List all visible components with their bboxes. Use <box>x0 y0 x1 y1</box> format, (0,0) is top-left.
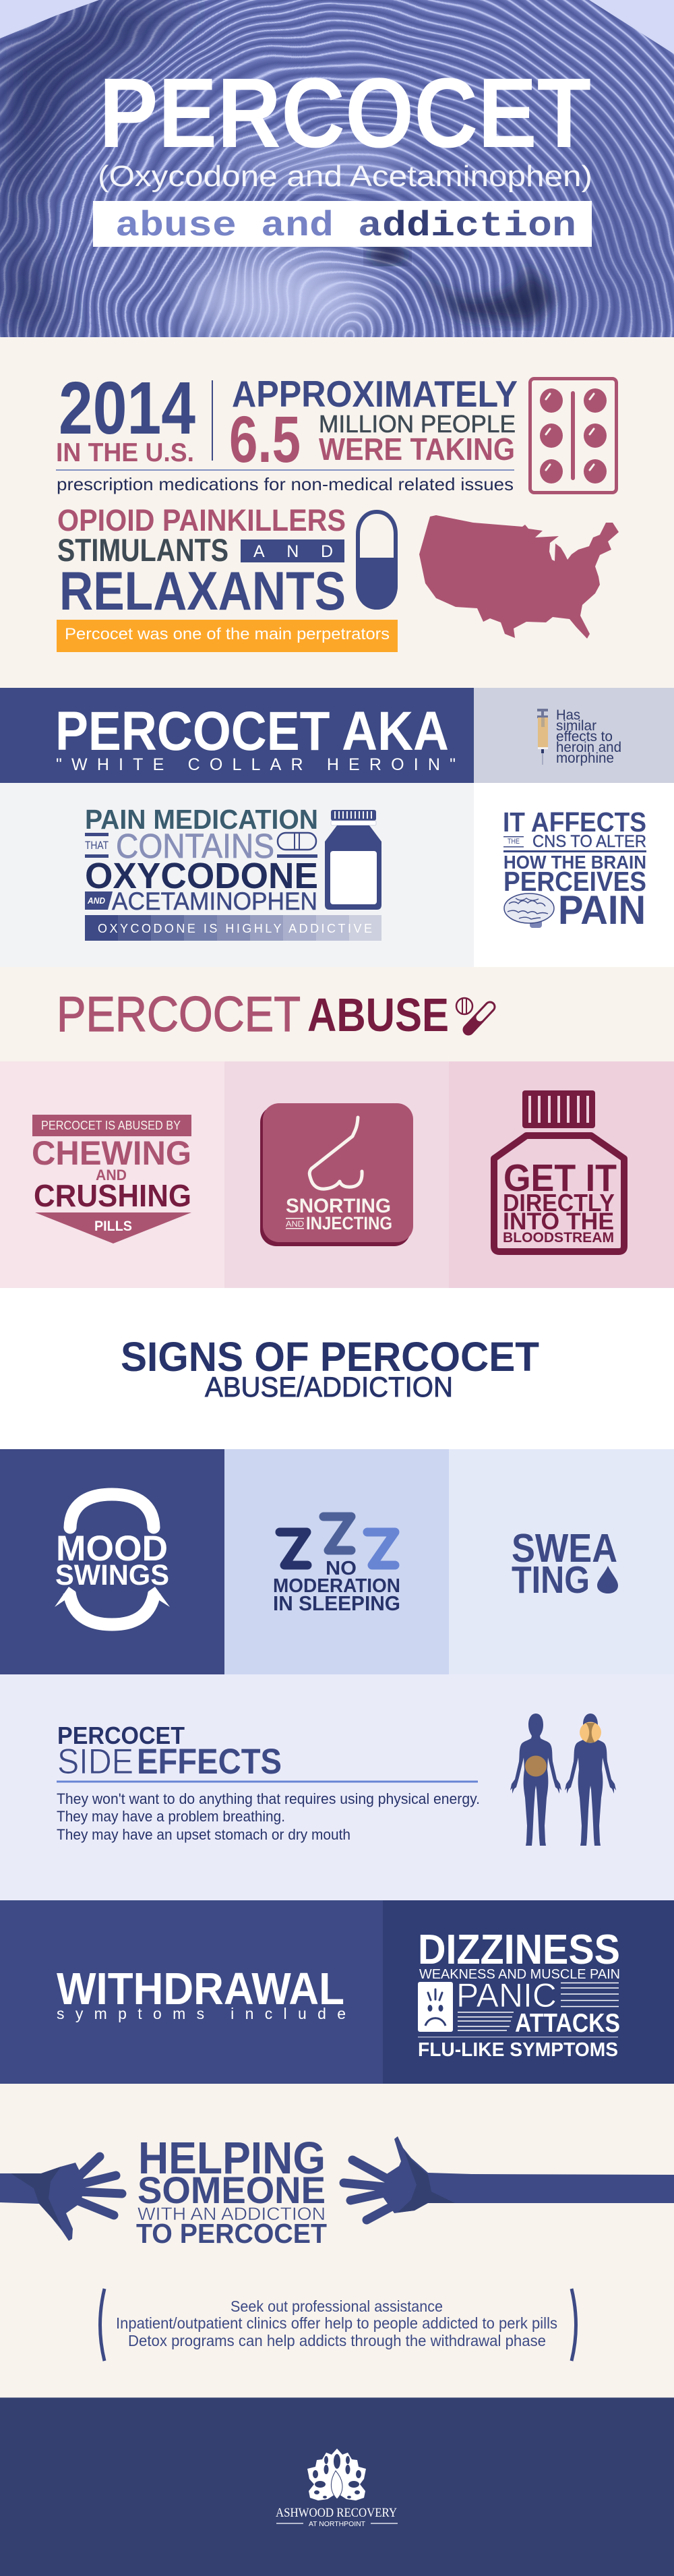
title: PERCOCET <box>99 58 591 169</box>
and: AND <box>286 1219 304 1229</box>
attacks: ATTACKS <box>515 2009 620 2038</box>
and tag <box>85 891 113 910</box>
oxycodone: OXYCODONE <box>85 856 318 896</box>
similar effects text: effects to <box>556 729 613 744</box>
icon: bottle outline <box>494 1136 624 1252</box>
icon: nose <box>309 1117 362 1189</box>
in sleeping: IN SLEEPING <box>273 1591 400 1615</box>
get it: GET IT <box>503 1157 617 1200</box>
similar effects text: heroin and <box>556 740 621 755</box>
icon: letter Z mid <box>324 1517 351 1550</box>
panel: similar effects <box>474 688 674 783</box>
panel: sweating <box>449 1449 674 1674</box>
crushing: CRUSHING <box>34 1178 191 1213</box>
icon: right hand <box>344 2136 674 2220</box>
icon: tablet <box>456 998 472 1014</box>
panel: mood swings <box>0 1449 224 1674</box>
side effect list <box>57 1790 480 1843</box>
no: NO <box>326 1558 357 1579</box>
panel: signs heading <box>0 1288 674 1449</box>
subheading: abuse/addiction: ABUSE/ADDICTION <box>205 1371 453 1403</box>
icon: capsule <box>468 1007 490 1030</box>
that <box>85 833 109 858</box>
how the brain: HOW THE BRAIN <box>503 852 646 873</box>
logo: Ashwood peacock <box>307 2449 366 2500</box>
panel: helping someone <box>0 2084 674 2397</box>
withdrawal: WITHDRAWAL <box>57 1964 344 2014</box>
opioid painkillers: OPIOID PAINKILLERS <box>57 503 346 537</box>
2014 figure: 2014 <box>59 367 195 450</box>
weakness and muscle pain: WEAKNESS AND MUSCLE PAIN <box>419 1967 620 1982</box>
stimulants: STIMULANTS <box>57 532 228 568</box>
that: THAT <box>85 839 109 852</box>
abuse and addiction box: abuse and addiction <box>115 206 576 246</box>
similar effects text <box>556 707 621 766</box>
perceives: PERCEIVES <box>503 866 646 897</box>
heading: abuse: ABUSE <box>307 989 449 1041</box>
moderation: MODERATION <box>273 1575 400 1597</box>
symptoms include: symptoms include <box>57 2005 346 2022</box>
help advice text: Inpatient/outpatient clinics offer help to people addicted to perk pills <box>116 2314 557 2332</box>
panel: withdrawal symptoms <box>383 1900 674 2084</box>
abused by label: PERCOCET IS ABUSED BY <box>41 1119 181 1132</box>
and tag <box>241 539 344 562</box>
pills arrow <box>35 1212 191 1243</box>
icon: blister pack <box>530 379 616 492</box>
callout: main perpetrators: Percocet was one of the main perpetrators <box>65 625 390 643</box>
abuse and addiction box <box>93 201 592 247</box>
CNS to alter: CNS TO ALTER <box>532 832 646 851</box>
highly addictive gradient bar: OXYCODONE IS HIGHLY ADDICTIVE <box>98 922 372 935</box>
icon: lower arrow arc <box>55 1587 170 1624</box>
callout: main perpetrators <box>57 620 398 652</box>
icon: back body figure <box>565 1714 616 1846</box>
subtitle: (Oxycodone and Acetaminophen) <box>98 160 592 193</box>
panel: Percocet AKA <box>0 688 474 783</box>
panel: 2014 statistics <box>0 337 674 688</box>
heading: Percocet: PERCOCET <box>57 987 301 1042</box>
heading: Percocet: PERCOCET <box>57 1722 185 1749</box>
icon: distressed face <box>418 1982 453 2032</box>
left bracket <box>100 2289 104 2361</box>
relaxants: RELAXANTS <box>59 561 346 622</box>
pain medication heading: PAIN MEDICATION <box>85 804 318 835</box>
dizziness: DIZZINESS <box>418 1927 620 1973</box>
panel: affects the CNS <box>474 783 674 967</box>
swings: SWINGS <box>55 1559 169 1591</box>
similar effects text: morphine <box>556 751 614 766</box>
icon: capsule <box>356 512 398 610</box>
the: THE <box>508 838 520 846</box>
someone: SOMEONE <box>137 2169 326 2211</box>
million people: MILLION PEOPLE <box>319 410 516 438</box>
logo name: ASHWOOD RECOVERY <box>276 2506 397 2520</box>
and tag: AND <box>253 542 333 561</box>
side effect list: They won't want to do anything that requires using physical energy. <box>57 1790 480 1807</box>
contains: CONTAINS <box>116 827 274 865</box>
white collar heroin: "WHITE COLLAR HEROIN" <box>56 755 456 774</box>
the <box>503 836 524 847</box>
icon: pill bottle <box>325 810 381 910</box>
side effect list: They may have an upset stomach or dry mouth <box>57 1826 350 1843</box>
panic: PANIC <box>456 1977 557 2014</box>
icon: bottle cap <box>522 1090 595 1128</box>
in the U.S.: IN THE U.S. <box>56 438 194 467</box>
and: AND <box>96 1167 127 1183</box>
icon: small capsule <box>277 833 317 858</box>
right bracket <box>572 2289 576 2361</box>
footer <box>0 2397 674 2576</box>
icon: letter Z light <box>367 1532 395 1565</box>
were taking: WERE TAKING <box>319 432 515 467</box>
heading: signs of Percocet: SIGNS OF PERCOCET <box>121 1334 539 1380</box>
icon: brain <box>504 894 554 928</box>
icon: left hand <box>0 2157 122 2241</box>
it affects: IT AFFECTS <box>503 807 646 838</box>
panel: withdrawal <box>0 1900 383 2084</box>
pain: PAIN <box>558 887 646 933</box>
prescription text: prescription medications for non-medical related issues <box>57 474 514 494</box>
panel: side effects <box>0 1674 674 1900</box>
snorting: SNORTING <box>286 1195 391 1217</box>
mood: MOOD <box>56 1529 168 1569</box>
panel: Percocet abuse heading <box>0 967 674 1061</box>
similar effects text: similar <box>556 718 596 734</box>
help advice text: Detox programs can help addicts through the withdrawal phase <box>128 2332 546 2349</box>
injecting: INJECTING <box>306 1213 392 1233</box>
and tag: AND <box>87 896 106 906</box>
panel: get it into the bloodstream <box>449 1061 674 1288</box>
side effect list: They may have a problem breathing. <box>57 1808 285 1825</box>
to Percocet: TO PERCOCET <box>136 2218 327 2249</box>
acetaminophen: ACETAMINOPHEN <box>112 887 317 915</box>
card <box>260 1106 410 1246</box>
icon: syringe <box>537 709 548 765</box>
panel: no moderation in sleeping <box>224 1449 449 1674</box>
ting: TING <box>512 1558 590 1602</box>
into the: INTO THE <box>503 1208 614 1235</box>
icon: front body figure <box>510 1714 561 1846</box>
logo tagline: AT NORTHPOINT <box>309 2520 366 2528</box>
panel: pain medication <box>0 783 474 967</box>
bloodstream: BLOODSTREAM <box>503 1230 614 1246</box>
approximately: APPROXIMATELY <box>232 373 518 415</box>
help advice text <box>116 2297 557 2349</box>
help advice text: Seek out professional assistance <box>231 2297 443 2315</box>
panel: snorting and injecting <box>224 1061 449 1288</box>
heading: side: SIDE <box>57 1742 133 1782</box>
abused by label <box>32 1115 191 1136</box>
directly: DIRECTLY <box>503 1189 615 1217</box>
chewing: CHEWING <box>32 1134 191 1172</box>
panel: chewing and crushing <box>0 1061 224 1288</box>
icon: upper arc <box>70 1494 154 1527</box>
helping: HELPING <box>138 2133 326 2184</box>
icon: letter Z dark <box>280 1532 307 1565</box>
map: United States <box>419 515 619 639</box>
similar effects text: Has <box>556 707 580 723</box>
with an addiction: WITH AN ADDICTION <box>137 2204 326 2224</box>
heading: Percocet AKA: PERCOCET AKA <box>55 701 449 762</box>
pills arrow: PILLS <box>94 1219 132 1234</box>
flu-like symptoms: FLU-LIKE SYMPTOMS <box>418 2039 618 2061</box>
swea: SWEA <box>512 1526 617 1571</box>
heading: effects: EFFECTS <box>137 1742 282 1782</box>
hero banner <box>0 0 674 337</box>
highly addictive gradient bar <box>85 915 381 941</box>
icon: sweat drop <box>597 1566 618 1593</box>
6.5 figure: 6.5 <box>229 403 301 476</box>
